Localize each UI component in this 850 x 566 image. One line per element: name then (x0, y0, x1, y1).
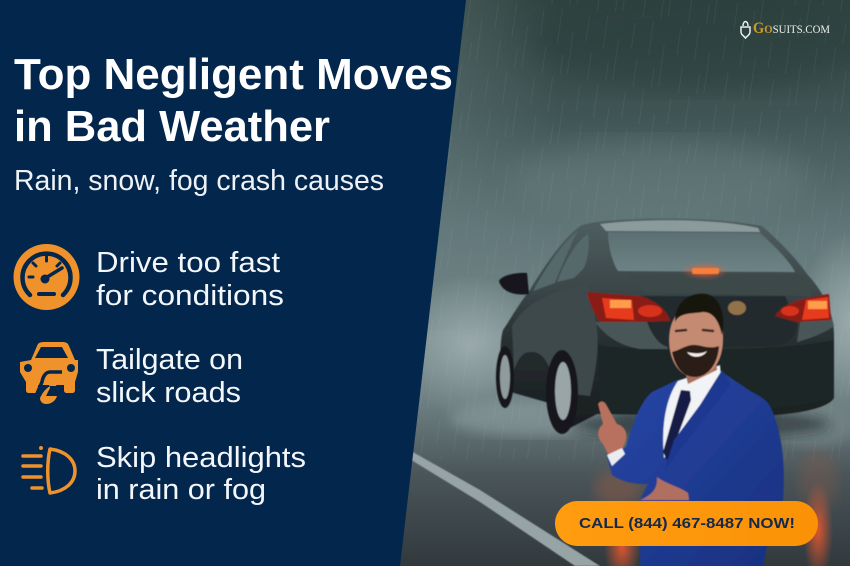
attorney figure (598, 294, 784, 566)
car body (500, 219, 834, 428)
hair (675, 294, 723, 335)
road shadow (570, 410, 830, 438)
item text: drive too fast: Drive too fast (96, 247, 280, 279)
item text: drive too fast (96, 247, 284, 312)
tie (663, 390, 691, 462)
photo background: rainy road (380, 0, 850, 566)
item text: skip headlights (96, 442, 306, 506)
title (14, 50, 453, 151)
shirt (663, 365, 721, 458)
brake light (681, 262, 729, 280)
item text: tailgate: Tailgate on (96, 344, 243, 376)
beard (672, 345, 719, 377)
suit (607, 372, 784, 566)
panel: navy text panel (0, 0, 466, 566)
logo: GoSuits.com: GOSUITS.COM (753, 20, 830, 37)
rear window (608, 232, 795, 272)
item text: drive too fast: for conditions (96, 280, 284, 312)
pointing hand (598, 401, 627, 466)
door panels (512, 285, 598, 396)
eyes (676, 330, 713, 331)
lapel (664, 370, 731, 471)
call to action button (555, 501, 818, 546)
right tail light (775, 294, 831, 322)
icon: speedometer (14, 244, 80, 310)
item text: tailgate: slick roads (96, 377, 241, 409)
rear wheel near (546, 350, 578, 434)
neck (682, 356, 717, 384)
side windows (533, 231, 578, 291)
title: in Bad Weather (14, 102, 330, 151)
road line (408, 451, 600, 566)
title: Top Negligent Moves (14, 50, 453, 99)
subtitle: Rain, snow, fog crash causes (14, 165, 384, 197)
plate recess (640, 296, 797, 347)
smile (687, 351, 707, 357)
trunk lid (628, 274, 811, 296)
side mirror (499, 273, 529, 294)
icon: headlight (23, 446, 75, 493)
lower hand (640, 477, 689, 500)
car (496, 219, 834, 438)
icon: car with steering (20, 342, 78, 404)
bumper light panel (595, 322, 668, 349)
item text: skip headlights: in rain or fog (96, 474, 266, 506)
front wheel (496, 346, 514, 408)
plate lamp (728, 301, 746, 315)
lower bumper shade (598, 340, 834, 413)
left tail light (587, 292, 670, 322)
item text: tailgate (96, 344, 243, 409)
item text: skip headlights: Skip headlights (96, 442, 306, 474)
roof highlight (600, 220, 760, 232)
head (669, 303, 723, 377)
call to action button: CALL (844) 467-8487 NOW! (579, 515, 795, 532)
